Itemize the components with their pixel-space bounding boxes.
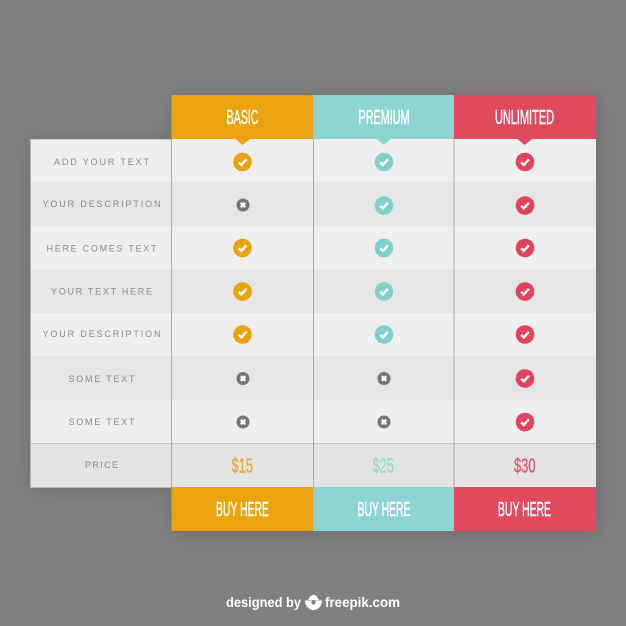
column header: unlimited: UNLIMITED xyxy=(495,107,554,129)
prices: $30 xyxy=(514,456,536,478)
button: basic buy here: BUY HERE xyxy=(216,499,269,521)
row labels: PRICE xyxy=(85,460,118,470)
footer credit: designed by xyxy=(226,595,301,610)
button: unlimited buy here xyxy=(454,487,596,531)
icons: premium column xyxy=(375,153,393,428)
footer credit xyxy=(226,594,400,610)
button: premium buy here xyxy=(313,487,454,531)
column header: premium: PREMIUM xyxy=(358,107,410,129)
row labels: SOME TEXT xyxy=(68,374,135,384)
icon: freepik logo xyxy=(305,594,322,610)
button: basic buy here xyxy=(172,487,313,531)
footer credit: freepik.com xyxy=(325,595,400,610)
column header: basic xyxy=(172,95,313,145)
icons: unlimited column xyxy=(516,153,534,431)
column header: premium xyxy=(313,95,454,145)
icons: basic column xyxy=(233,153,252,428)
row labels: YOUR DESCRIPTION xyxy=(42,329,160,339)
row labels: YOUR DESCRIPTION xyxy=(42,199,160,209)
row labels: HERE COMES TEXT xyxy=(46,244,157,254)
row labels: SOME TEXT xyxy=(68,417,135,427)
prices: $15 xyxy=(232,456,253,478)
button: unlimited buy here: BUY HERE xyxy=(498,499,551,521)
row labels: ADD YOUR TEXT xyxy=(54,157,150,167)
button: premium buy here: BUY HERE xyxy=(358,499,410,521)
row labels xyxy=(42,157,160,470)
row labels: YOUR TEXT HERE xyxy=(51,286,152,296)
panel: pricing table body xyxy=(30,139,596,488)
column header: unlimited xyxy=(454,95,596,145)
column header: basic: BASIC xyxy=(226,107,258,129)
prices xyxy=(232,456,536,478)
prices: $25 xyxy=(372,456,394,478)
